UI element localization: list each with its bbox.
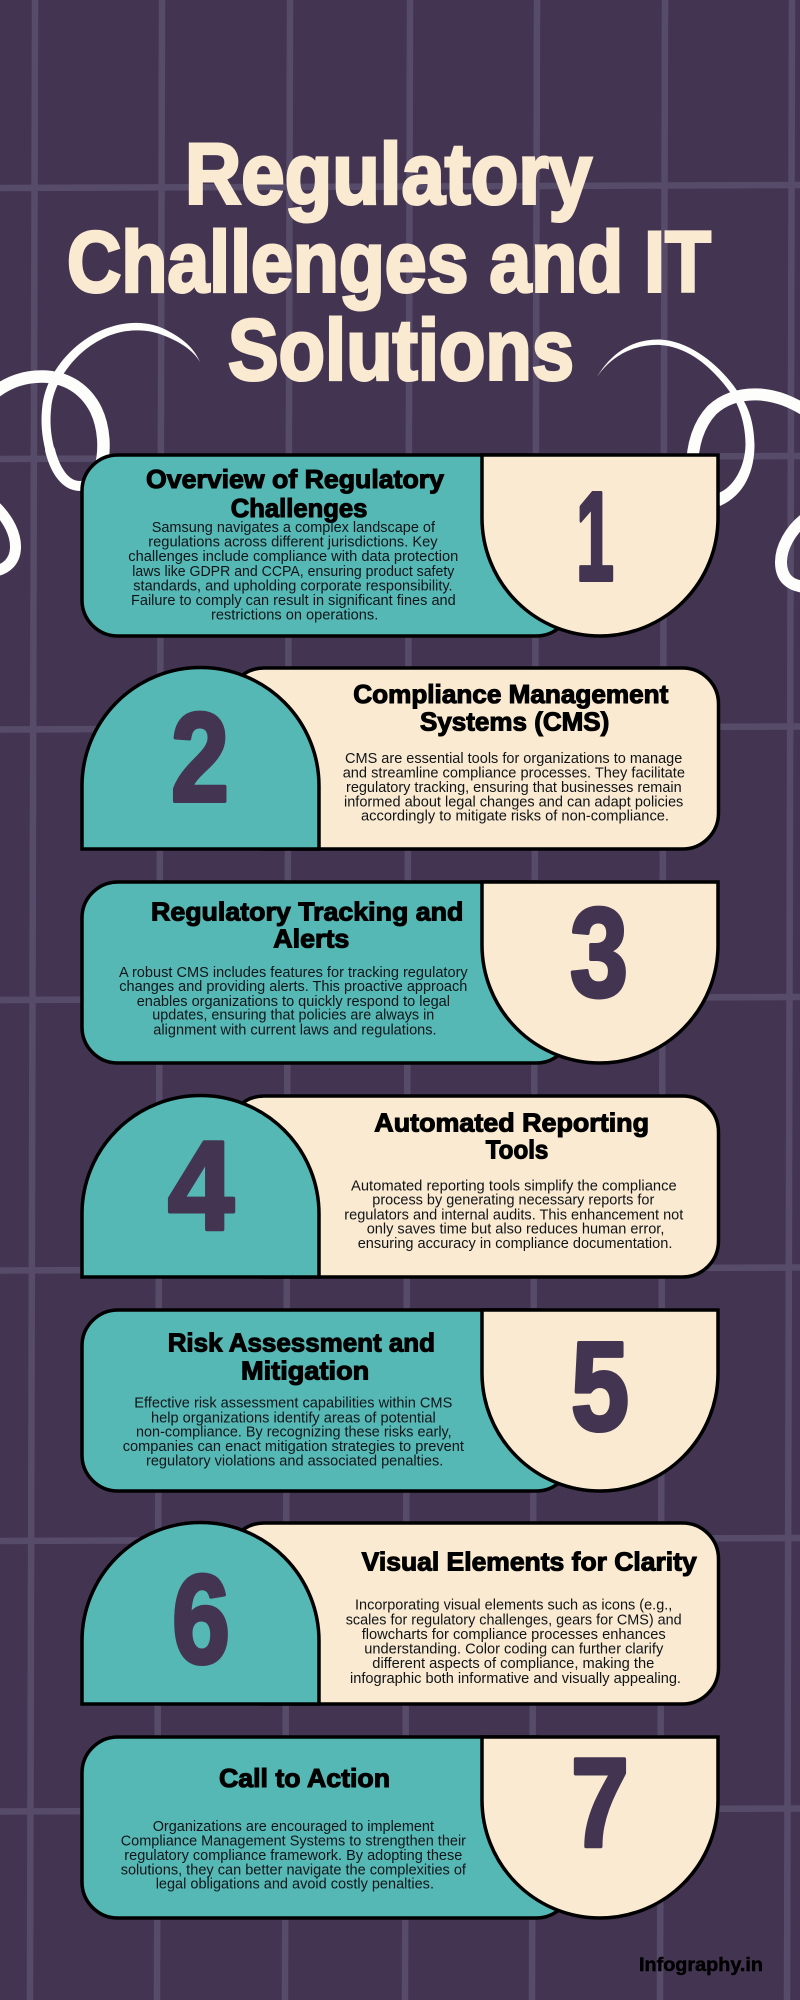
panel 2 body text: CMS are essential tools for organizations to manage bbox=[345, 750, 682, 767]
panel 7 body text: Organizations are encouraged to implement bbox=[153, 1818, 435, 1835]
panel 5 body text: companies can enact mitigation strategies to prevent bbox=[123, 1438, 465, 1455]
panel 6 number badge bbox=[82, 1523, 319, 1704]
panel 7 body text: solutions, they can better navigate the complexities of bbox=[121, 1862, 467, 1879]
panel 5 heading: Risk Assessment and bbox=[168, 1328, 435, 1358]
panel 1 body text bbox=[128, 519, 458, 624]
panel 4 body text: process by generating necessary reports for bbox=[372, 1191, 654, 1208]
panel 7 body text: Compliance Management Systems to strengthen their bbox=[121, 1833, 466, 1850]
panel 2 body text: accordingly to mitigate risks of non-compliance. bbox=[361, 808, 669, 825]
panel 2 body text: informed about legal changes and can adapt policies bbox=[344, 794, 683, 811]
panel 2: compliance management systems bbox=[82, 668, 718, 849]
title: Challenges and IT bbox=[67, 214, 711, 310]
panel 6 body text bbox=[346, 1597, 682, 1687]
panel 6 heading: Visual Elements for Clarity bbox=[362, 1547, 697, 1577]
number 5: 5 bbox=[571, 1316, 629, 1457]
number 3: 3 bbox=[570, 882, 628, 1023]
panel 4 body text: ensuring accuracy in compliance documentation. bbox=[358, 1235, 672, 1252]
panel 1 heading: Challenges bbox=[231, 493, 367, 523]
panel 4 body text: regulators and internal audits. This enhancement not bbox=[344, 1206, 684, 1223]
number 6: 6 bbox=[172, 1549, 230, 1690]
panel 1 body text: restrictions on operations. bbox=[211, 607, 378, 624]
number 4: 4 bbox=[168, 1115, 234, 1256]
panel 1 number badge bbox=[482, 455, 718, 636]
panel 3 body text bbox=[119, 964, 468, 1039]
panel 5 heading: Mitigation bbox=[241, 1355, 369, 1385]
panel 1 teal body bbox=[82, 455, 572, 636]
title: Solutions bbox=[228, 302, 574, 398]
panel 4 number badge bbox=[82, 1096, 319, 1277]
panel 3 heading: Regulatory Tracking and bbox=[151, 896, 463, 926]
panel 5 heading bbox=[168, 1328, 435, 1385]
panel 6 cream body bbox=[228, 1523, 718, 1704]
title: Regulatory bbox=[185, 126, 592, 222]
panel 4 heading bbox=[374, 1108, 649, 1165]
panel 2 number badge bbox=[82, 668, 319, 849]
panel 3 heading bbox=[151, 896, 463, 954]
panel 7 body text: regulatory compliance framework. By adopting these bbox=[124, 1847, 462, 1864]
panel 5 body text: non-compliance. By recognizing these risks early, bbox=[136, 1424, 452, 1441]
panel 7 number badge bbox=[482, 1737, 718, 1918]
panel 3 body text: alignment with current laws and regulations. bbox=[153, 1022, 437, 1039]
panel 3: regulatory tracking and alerts bbox=[82, 882, 718, 1063]
panel 1: overview of regulatory challenges bbox=[82, 455, 718, 636]
panel 1 body text: Failure to comply can result in significant fines and bbox=[131, 592, 456, 609]
panel 6 body text: flowcharts for compliance processes enhances bbox=[362, 1626, 666, 1643]
panel 5 teal body bbox=[82, 1310, 572, 1491]
panel 7: call to action bbox=[82, 1732, 718, 1918]
panel 6 body text: scales for regulatory challenges, gears for CMS) and bbox=[346, 1612, 682, 1629]
panel 5: risk assessment and mitigation bbox=[82, 1310, 718, 1491]
panel 3 body text: updates, ensuring that policies are always in bbox=[152, 1007, 434, 1024]
panel 2 heading bbox=[353, 679, 669, 736]
panel 4 heading: Automated Reporting bbox=[374, 1108, 649, 1138]
panel 6: visual elements for clarity bbox=[82, 1523, 718, 1704]
panel 3 body text: changes and providing alerts. This proactive approach bbox=[119, 978, 467, 995]
panel 7 heading: Call to Action bbox=[219, 1763, 390, 1793]
panel 6 body text: different aspects of compliance, making the bbox=[372, 1655, 654, 1672]
panel 2 cream body bbox=[228, 668, 718, 849]
panel 7 body text bbox=[121, 1818, 467, 1893]
number 2: 2 bbox=[171, 687, 229, 828]
panel 2 body text: regulatory tracking, ensuring that businesses remain bbox=[346, 779, 682, 796]
panel 1 body text: regulations across different jurisdictions. Key bbox=[148, 534, 438, 551]
panel 3 body text: enables organizations to quickly respond to legal bbox=[137, 993, 450, 1010]
panel 6 body text: understanding. Color coding can further clarify bbox=[364, 1641, 664, 1658]
panel 7 teal body bbox=[82, 1737, 572, 1918]
panel 5 body text bbox=[123, 1395, 465, 1470]
panel 1 body text: standards, and upholding corporate responsibility. bbox=[133, 577, 453, 594]
panel 4: automated reporting tools bbox=[82, 1096, 718, 1277]
panel 5 number badge bbox=[482, 1310, 718, 1491]
decorative swirl: right bbox=[597, 339, 800, 587]
panel 1 body text: Samsung navigates a complex landscape of bbox=[152, 519, 436, 536]
panel 4 body text bbox=[344, 1177, 684, 1252]
panel 6 body text: infographic both informative and visually appealing. bbox=[350, 1670, 681, 1687]
panel 2 heading: Compliance Management bbox=[353, 679, 669, 709]
panel 1 heading bbox=[146, 464, 445, 523]
panel 1 body text: laws like GDPR and CCPA, ensuring product safety bbox=[132, 563, 455, 580]
footer brand: Infography.in bbox=[639, 1955, 763, 1976]
panel 2 body text bbox=[343, 750, 685, 825]
panel 1 body text: challenges include compliance with data protection bbox=[128, 548, 458, 565]
panel 5 body text: Effective risk assessment capabilities within CMS bbox=[134, 1395, 452, 1412]
panel 4 heading: Tools bbox=[486, 1135, 548, 1165]
panel 5 body text: regulatory violations and associated penalties. bbox=[146, 1453, 443, 1470]
panel 2 body text: and streamline compliance processes. They facilitate bbox=[343, 764, 685, 781]
panel 6 body text: Incorporating visual elements such as icons (e.g., bbox=[355, 1597, 672, 1614]
panel 3 teal body bbox=[82, 882, 572, 1063]
panel 3 body text: A robust CMS includes features for tracking regulatory bbox=[119, 964, 468, 981]
panel 3 heading: Alerts bbox=[273, 924, 349, 954]
number 7: 7 bbox=[571, 1732, 629, 1873]
panel 2 heading: Systems (CMS) bbox=[420, 706, 609, 736]
title bbox=[67, 126, 711, 398]
panel 4 body text: only saves time but also reduces human error, bbox=[367, 1220, 664, 1237]
decorative swirl: left bbox=[0, 323, 200, 571]
panel 4 body text: Automated reporting tools simplify the compliance bbox=[351, 1177, 677, 1194]
panel 7 body text: legal obligations and avoid costly penalties. bbox=[156, 1876, 434, 1893]
panel 3 number badge bbox=[482, 882, 718, 1063]
panel 4 cream body bbox=[228, 1096, 718, 1277]
panel 5 body text: help organizations identify areas of potential bbox=[151, 1409, 436, 1426]
number 1: 1 bbox=[576, 466, 614, 607]
panel 1 heading: Overview of Regulatory bbox=[146, 464, 445, 494]
